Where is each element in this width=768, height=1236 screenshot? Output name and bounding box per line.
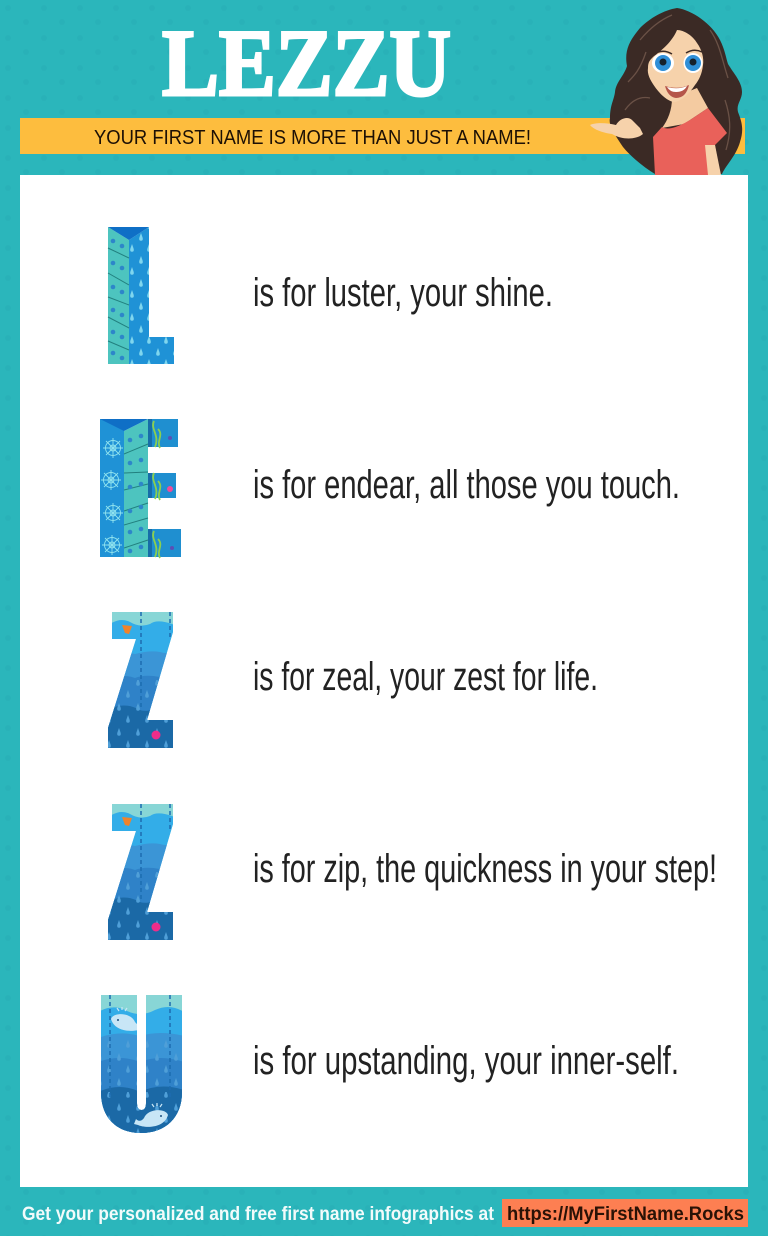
character: woman presenting xyxy=(590,8,742,175)
letter L xyxy=(108,227,174,364)
shirt xyxy=(653,108,727,175)
letter U xyxy=(98,993,184,1135)
sentence L: is for luster, your shine. xyxy=(253,271,553,315)
row 5: U xyxy=(98,993,679,1135)
mouth xyxy=(665,85,689,98)
hair xyxy=(610,8,742,174)
neck xyxy=(662,88,708,128)
footer text: Get your personalized and free first name infographics at xyxy=(22,1204,495,1225)
row 1: L xyxy=(108,227,553,364)
letter E xyxy=(100,419,181,558)
row 3: Z xyxy=(105,610,598,750)
face xyxy=(648,30,703,102)
letter Z xyxy=(105,610,177,750)
row 4: Z xyxy=(105,802,717,942)
sentence Z zeal: is for zeal, your zest for life. xyxy=(253,655,598,699)
letter Z second xyxy=(105,802,177,942)
footer url badge: https://MyFirstName.Rocks xyxy=(507,1204,744,1225)
title: LEZZU xyxy=(162,10,451,116)
panel: letters xyxy=(20,175,748,1187)
eyes xyxy=(652,53,674,73)
right arm xyxy=(705,145,721,175)
open hand xyxy=(590,118,643,138)
subtitle banner xyxy=(20,118,745,154)
subtitle banner: YOUR FIRST NAME IS MORE THAN JUST A NAME! xyxy=(94,126,531,149)
row 2: E xyxy=(100,419,680,558)
